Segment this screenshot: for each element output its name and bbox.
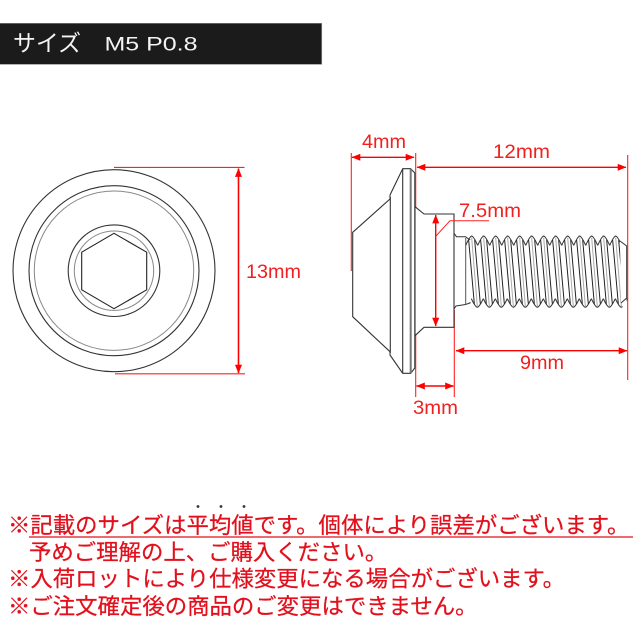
dimension: 7.5mm [436, 201, 521, 326]
dimension: 4mm: 4mm [362, 132, 406, 153]
note 1: ※記載のサイズは平均値です。個体により誤差がございます。 [8, 512, 629, 538]
note 3: ※ご注文確定後の商品のご変更はできません。 [8, 594, 478, 619]
dimension: 3mm [413, 386, 458, 419]
dimension: 12mm: 12mm [493, 142, 550, 163]
note 1 underline [29, 536, 633, 538]
collar [415, 207, 454, 336]
note 2: ※入荷ロットにより仕様変更になる場合がございます。 [8, 566, 565, 592]
head [353, 169, 415, 373]
dimension: 7.5mm: 7.5mm [459, 201, 521, 222]
header bar [0, 23, 322, 64]
emphasis dots [197, 505, 245, 508]
front view of bolt head [13, 170, 215, 372]
dimension: 13mm: 13mm [246, 262, 301, 283]
header bar: M5 P0.8 [104, 34, 198, 56]
side view of bolt [353, 169, 627, 373]
dimension: 9mm: 9mm [520, 353, 564, 374]
dimension: 4mm [352, 132, 414, 157]
threaded shaft [454, 230, 627, 310]
header bar: サイズ [13, 30, 81, 56]
extension lines for side view [351, 153, 628, 397]
note 1 continued: 予めご理解の上、ご購入ください。 [29, 540, 387, 565]
dimension: 13mm [114, 167, 301, 374]
notes [8, 505, 633, 619]
dimension: 3mm: 3mm [413, 398, 458, 419]
